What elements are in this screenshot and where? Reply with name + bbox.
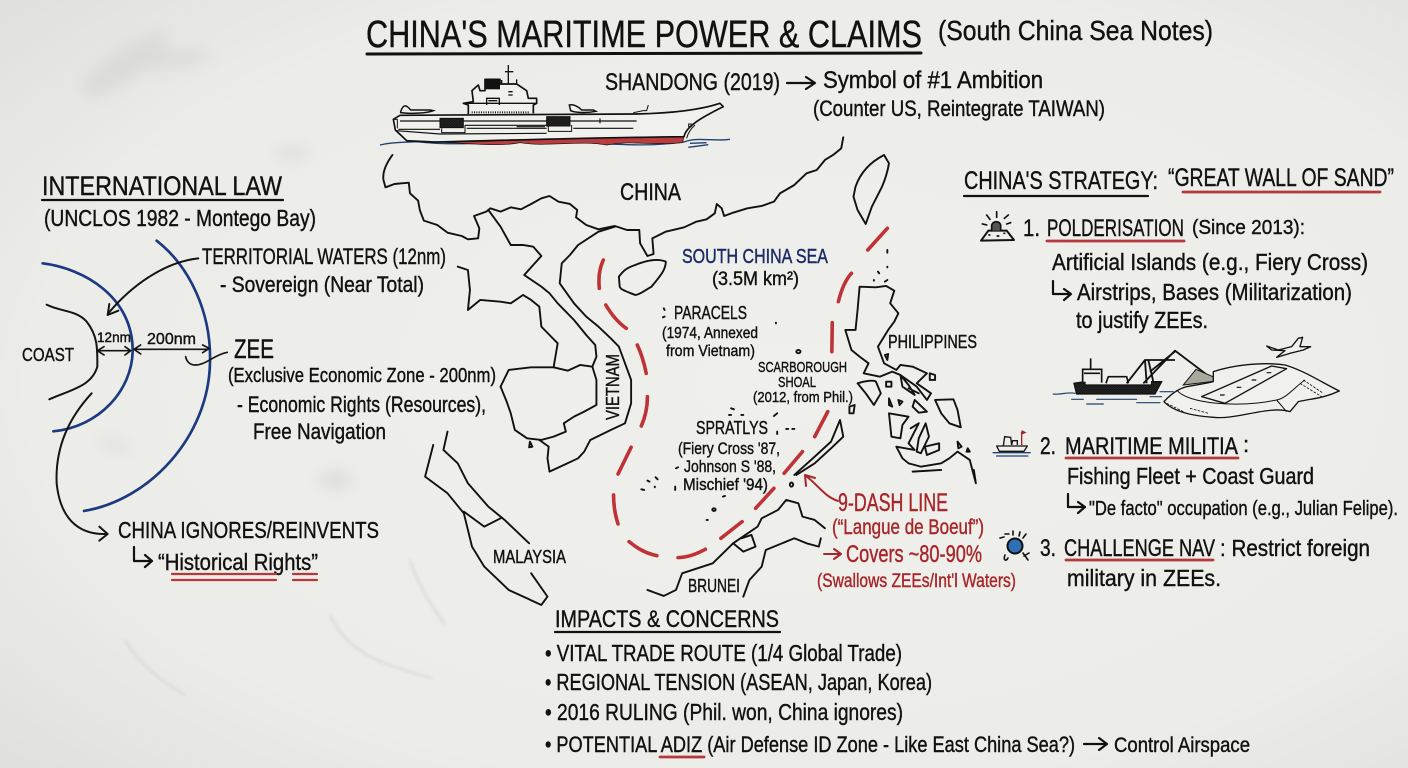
Visayas <box>889 375 961 438</box>
panel: impacts and concerns <box>545 606 1250 757</box>
text: ZEE: ZEE <box>234 334 274 364</box>
label: Brunei: BRUNEI <box>688 576 740 596</box>
nine-dash line <box>599 228 887 558</box>
label: 12nm: 12nm <box>97 329 131 345</box>
heading: impacts: IMPACTS & CONCERNS <box>555 606 779 633</box>
bullet: ADIZ: Control Airspace <box>1114 734 1250 757</box>
heading: international law: INTERNATIONAL LAW <box>42 171 282 201</box>
text: Shandong caption <box>605 67 1105 121</box>
item 2: maritime militia <box>1040 432 1398 520</box>
label: 200nm: 200nm <box>147 331 196 348</box>
text: territorial waters: TERRITORIAL WATERS (12nm) <box>202 244 446 269</box>
label: coast: COAST <box>22 345 74 365</box>
callout: China ignores: “Historical Rights” <box>158 549 318 575</box>
item 1: polderisation: to justify ZEEs. <box>1076 307 1208 333</box>
item 1: polderisation: Artificial Islands (e.g., Fiery Cross) <box>1052 249 1368 275</box>
panel: China's strategy <box>964 164 1398 591</box>
text: ZEE <box>228 334 496 444</box>
label: Spratlys: Mischief '94) <box>683 475 768 494</box>
coastlines <box>383 137 976 605</box>
text: ZEE: Free Navigation <box>253 419 386 444</box>
diagram: maritime zones <box>43 241 227 541</box>
item 1: polderisation: 1. <box>1023 215 1040 242</box>
bullet: regional tension: • REGIONAL TENSION (ASEAN, Japan, Korea) <box>545 669 932 695</box>
item 2: maritime militia: 2. <box>1040 433 1056 460</box>
illustration: dredger and artificial island <box>1053 337 1339 418</box>
text: UNCLOS: (UNCLOS 1982 - Montego Bay) <box>44 205 316 231</box>
label: Malaysia: MALAYSIA <box>493 547 566 567</box>
Taiwan <box>853 155 889 224</box>
text: Shandong caption: SHANDONG (2019) <box>605 69 780 96</box>
Mindoro <box>858 381 881 405</box>
Borneo <box>647 500 825 596</box>
label: Paracels <box>662 303 758 360</box>
label: Spratlys <box>678 418 780 494</box>
item 1: polderisation: POLDERISATION <box>1047 215 1184 242</box>
text: Shandong caption: Symbol of #1 Ambition <box>823 67 1043 94</box>
label: Vietnam: VIETNAM <box>603 354 623 420</box>
callout: 9-dash line: Covers ~80-90% <box>846 541 982 568</box>
label: Spratlys: SPRATLYS <box>696 418 768 438</box>
text: ZEE: (Exclusive Economic Zone - 200nm) <box>228 365 496 387</box>
callout: China ignores: CHINA IGNORES/REINVENTS <box>118 517 379 543</box>
item 3: challenge nav <box>1040 535 1370 591</box>
item 1: polderisation: Airstrips, Bases (Militarization) <box>1077 279 1352 305</box>
item 1: polderisation: (Since 2013): <box>1192 217 1305 239</box>
label: Paracels: (1974, Annexed <box>662 325 758 342</box>
heading: strategy <box>964 164 1394 196</box>
item 2: maritime militia: MARITIME MILITIA <box>1065 433 1238 460</box>
label: South China Sea: (3.5M km²) <box>712 269 799 290</box>
item 3: challenge nav: CHALLENGE NAV <box>1064 535 1215 562</box>
callout: 9-dash line <box>805 475 1016 592</box>
bullet: ADIZ: • POTENTIAL ADIZ (Air Defense ID Zone - Like East China Sea?) <box>545 732 1075 757</box>
label: South China Sea <box>682 246 829 290</box>
callout: 9-dash line: (Swallows ZEEs/Int'l Waters) <box>817 571 1016 592</box>
item 1: polderisation <box>1023 215 1368 333</box>
map: South China Sea <box>383 137 1016 605</box>
Hainan <box>619 260 666 295</box>
item 3: challenge nav: 3. <box>1040 535 1056 562</box>
label: Scarborough Shoal: (2012, from Phil.) <box>753 389 853 406</box>
item 3: challenge nav: : Restrict foreign <box>1220 535 1370 561</box>
icon: polderisation island <box>981 212 1014 241</box>
icon: aircraft carrier Shandong <box>380 65 730 147</box>
label: Spratlys: (Fiery Cross '87, <box>678 439 780 458</box>
label: Scarborough Shoal <box>753 359 853 406</box>
label: Scarborough Shoal: SCARBOROUGH <box>758 359 847 376</box>
item 2: maritime militia: : <box>1243 432 1249 457</box>
text: Shandong caption: (Counter US, Reintegrate TAIWAN) <box>813 96 1105 121</box>
label: Paracels: PARACELS <box>674 303 747 323</box>
bullet: trade route: • VITAL TRADE ROUTE (1/4 Global Trade) <box>545 640 902 666</box>
Malay peninsula <box>443 432 529 543</box>
icon: militia boat <box>993 430 1031 456</box>
label: Paracels: from Vietnam) <box>666 343 755 360</box>
island dots <box>641 250 887 520</box>
label: China: CHINA <box>620 179 681 206</box>
text: ZEE: - Economic Rights (Resources), <box>237 392 486 417</box>
label: Philippines: PHILIPPINES <box>888 332 977 352</box>
bullet: 2016 ruling: • 2016 RULING (Phil. won, China ignores) <box>545 699 903 725</box>
text: territorial waters: - Sovereign (Near Total) <box>220 272 424 297</box>
label: South China Sea: SOUTH CHINA SEA <box>682 246 829 268</box>
panel: international law <box>22 171 496 580</box>
heading: strategy: CHINA'S STRATEGY: <box>964 167 1158 195</box>
callout: 9-dash line: (“Langue de Boeuf”) <box>832 516 984 539</box>
label: Spratlys: Johnson S '88, <box>684 457 776 476</box>
Luzon <box>845 286 931 400</box>
Palawan <box>794 420 843 475</box>
title: CHINA'S MARITIME POWER & CLAIMS <box>366 14 922 56</box>
callout: 9-dash line: 9-DASH LINE <box>838 489 948 517</box>
label: Scarborough Shoal: SHOAL <box>778 374 816 391</box>
Mindanao <box>896 423 976 483</box>
subtitle: (South China Sea Notes) <box>938 15 1213 46</box>
callout: China ignores <box>118 517 379 580</box>
item 2: maritime militia: Fishing Fleet + Coast Guard <box>1067 463 1314 489</box>
item 3: challenge nav: military in ZEEs. <box>1067 565 1221 591</box>
icon: radar / navigation warning <box>1000 531 1029 560</box>
text: territorial waters <box>202 244 446 297</box>
